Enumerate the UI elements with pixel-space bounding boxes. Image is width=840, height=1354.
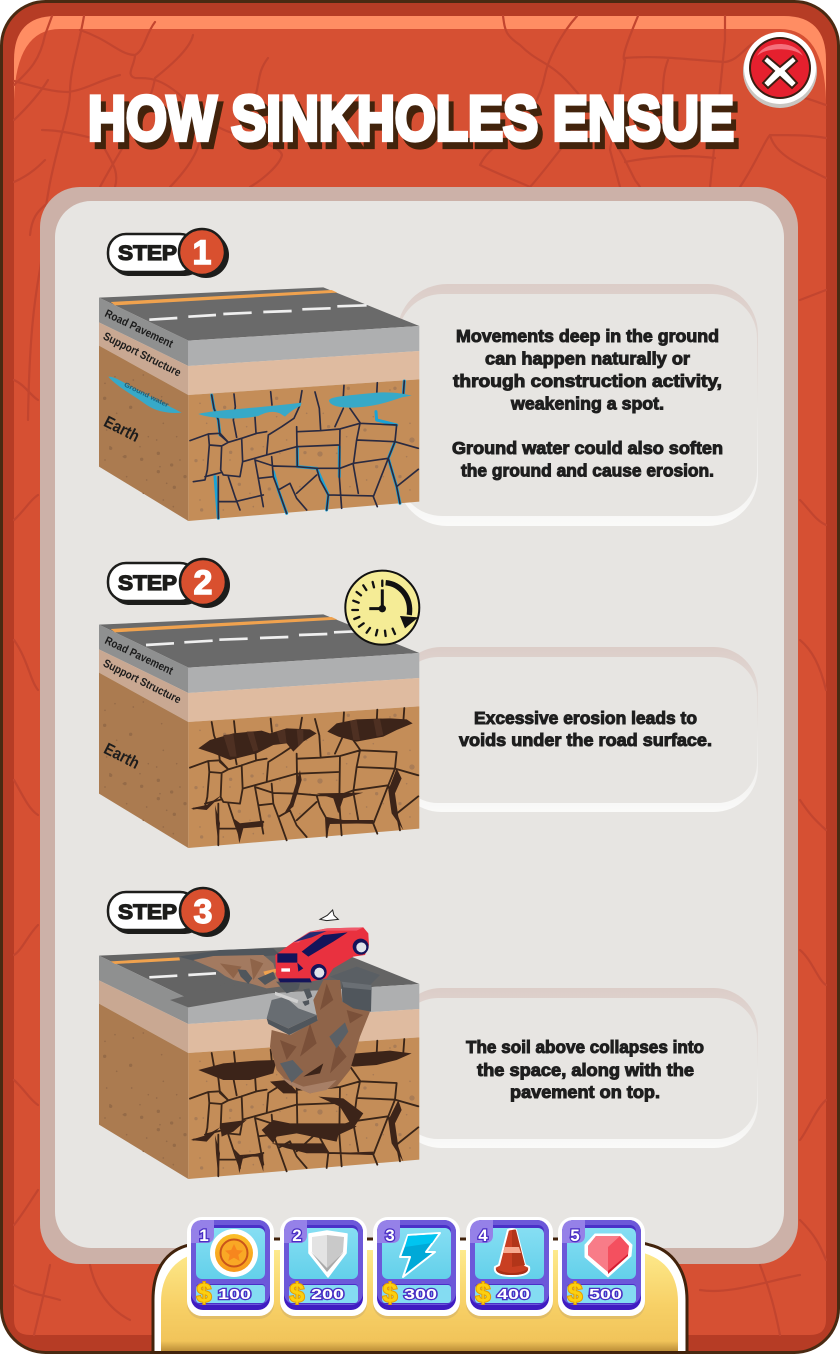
step 1 text: Ground water could also soften: [452, 438, 723, 458]
card 5: ruby gem: 5: [570, 1226, 580, 1245]
step 3 text: pavement on top.: [510, 1082, 660, 1102]
step 3 text: [466, 1037, 704, 1102]
card 5: ruby gem: [558, 1217, 645, 1319]
step 2 text: [459, 708, 712, 750]
step 2 diagram: Road Pavement: [103, 635, 175, 678]
step 1 text: the ground and cause erosion.: [461, 460, 714, 480]
step 1 badge: STEP: [118, 242, 177, 265]
panel: step 3 text box: [397, 988, 758, 1148]
card 5: ruby gem: $: [567, 1278, 583, 1308]
card 4: traffic cone: 4: [478, 1226, 488, 1245]
title: HOW SINKHOLES ENSUE: [93, 90, 739, 161]
step 1 text: Movements deep in the ground: [456, 326, 719, 346]
icon: close button: [743, 32, 817, 108]
step 1 diagram: Support Structure: [101, 331, 183, 379]
card 3: lightning bolt: [373, 1217, 460, 1319]
car: [275, 927, 369, 982]
step 3 badge: [108, 888, 230, 937]
card 1: coin: 1: [199, 1226, 209, 1245]
card 1: coin: $: [196, 1278, 212, 1308]
card 2: shield: [280, 1217, 367, 1319]
card 4: traffic cone: [466, 1217, 553, 1319]
card 1: coin: [187, 1217, 274, 1319]
step 2 badge: STEP: [118, 572, 177, 595]
card 3: lightning bolt: $: [382, 1278, 398, 1308]
step 2 text: voids under the road surface.: [459, 730, 712, 750]
card 5: ruby gem: 500: [589, 1286, 622, 1303]
step 1 diagram: Earth: [101, 412, 143, 446]
card 2: shield: 200: [311, 1286, 344, 1303]
card 3: lightning bolt: 3: [385, 1226, 395, 1245]
icon: clock: [345, 571, 419, 645]
sparks: [320, 910, 338, 921]
step 2 diagram: [99, 614, 419, 848]
panel: step 2 text box: [397, 647, 758, 812]
title: HOW SINKHOLES ENSUE: [88, 83, 734, 154]
step 2 badge: 2: [194, 564, 212, 602]
step 3 badge: 3: [194, 893, 212, 931]
card 2: shield: $: [289, 1278, 305, 1308]
card 1: coin: 100: [218, 1286, 251, 1303]
step 3 badge: STEP: [118, 901, 177, 924]
step 2 diagram: Earth: [101, 739, 143, 773]
card 4: traffic cone: 400: [497, 1286, 530, 1303]
step 1 text: [452, 326, 723, 480]
card 4: traffic cone: $: [475, 1278, 491, 1308]
step 1 text: through construction activity,: [453, 371, 722, 391]
card 3: lightning bolt: 300: [404, 1286, 437, 1303]
card 2: shield: 2: [292, 1226, 302, 1245]
step 2 badge: [108, 559, 230, 608]
step 2 diagram: Support Structure: [101, 658, 183, 706]
step 1 diagram: Road Pavement: [103, 308, 175, 351]
step 1 text: weakening a spot.: [510, 394, 664, 414]
panel: step 1 text box: [397, 284, 758, 526]
step 3 text: the space, along with the: [477, 1060, 694, 1080]
step 3 diagram: [99, 910, 419, 1179]
step 1 text: can happen naturally or: [485, 348, 690, 368]
bottom tray: [150, 1239, 690, 1354]
step 1 diagram: [99, 287, 419, 521]
step 2 text: Excessive erosion leads to: [474, 708, 697, 728]
step 1 badge: [108, 229, 229, 278]
step 1 badge: 1: [193, 234, 211, 272]
step 1 diagram: Ground water: [123, 381, 170, 409]
step 3 text: The soil above collapses into: [466, 1037, 704, 1057]
panel: main content: [40, 187, 798, 1264]
